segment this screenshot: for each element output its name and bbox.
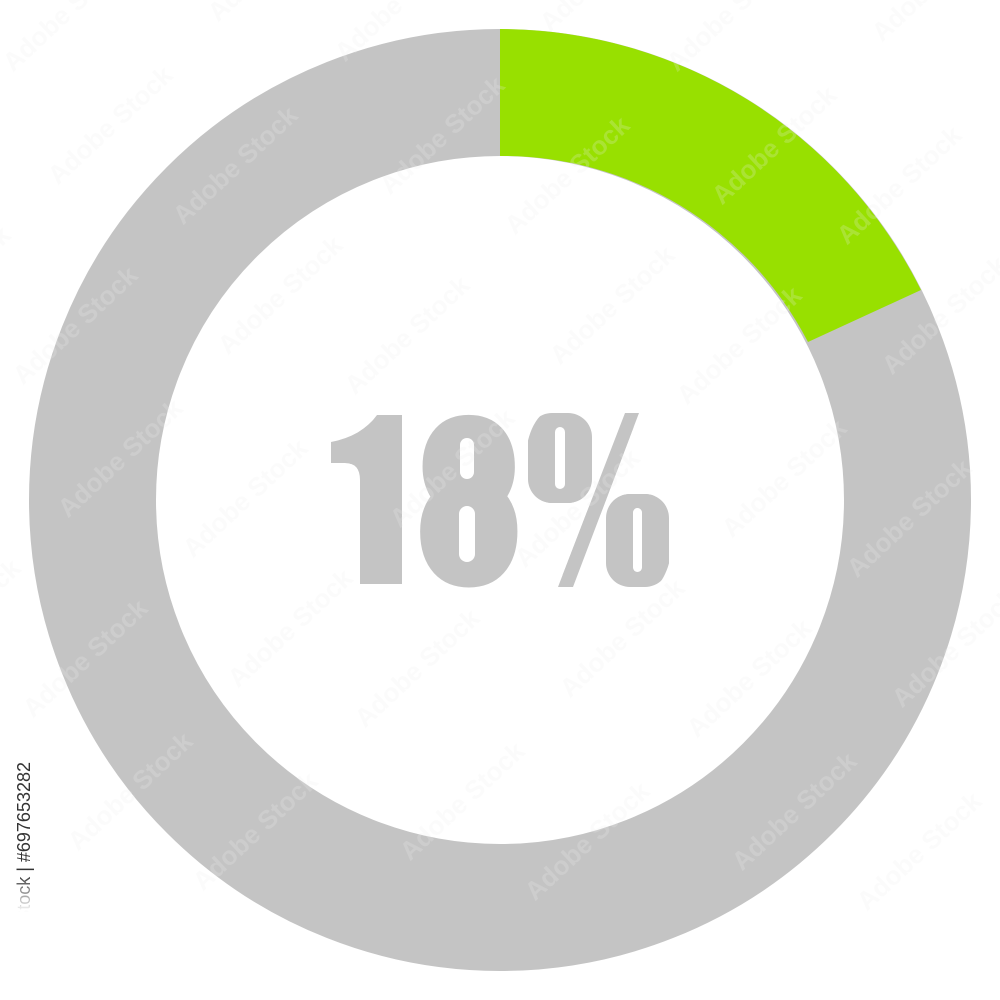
- watermark pattern: Adobe Stock: [62, 725, 199, 856]
- watermark pattern: Adobe Stock: [509, 442, 646, 573]
- percentage label: 8: [427, 390, 510, 613]
- percentage label: [331, 413, 669, 588]
- watermark pattern: Adobe Stock: [671, 279, 808, 410]
- watermark pattern: Adobe Stock: [706, 79, 843, 210]
- watermark pattern: Adobe Stock: [222, 562, 359, 693]
- watermark pattern: Adobe Stock: [851, 785, 988, 916]
- watermark pattern: Adobe Stock: [394, 735, 531, 866]
- donut chart: [92, 29, 921, 908]
- donut track: [92, 92, 908, 908]
- donut green segment: [500, 29, 921, 342]
- percentage label: 1: [325, 371, 431, 637]
- watermark pattern: Adobe Stock: [716, 412, 853, 543]
- watermark pattern: Adobe Stock: [187, 765, 324, 896]
- watermark pattern: Adobe Stock: [167, 99, 304, 230]
- watermark pattern: Adobe Stock: [554, 572, 691, 703]
- watermark pattern: Adobe Stock: [52, 392, 189, 523]
- watermark pattern: Adobe Stock: [831, 119, 968, 250]
- watermark pattern: Adobe Stock: [544, 239, 681, 370]
- watermark pattern: Adobe Stock: [349, 602, 486, 733]
- watermark pattern: Adobe Stock: [212, 229, 349, 360]
- watermark pattern: Adobe Stock: [841, 452, 978, 583]
- stock id caption: Adobe Stock | #697653282: [14, 762, 34, 979]
- watermark pattern: Adobe Stock: [339, 269, 476, 400]
- watermark pattern: Adobe Stock: [519, 775, 656, 906]
- percentage label: %: [534, 381, 664, 621]
- watermark pattern: Adobe Stock: [726, 745, 863, 876]
- watermark pattern: Adobe Stock: [681, 612, 818, 743]
- watermark pattern: Adobe Stock: [42, 59, 179, 190]
- watermark pattern: Adobe Stock: [17, 592, 154, 723]
- watermark pattern: Adobe Stock: [177, 432, 314, 563]
- watermark pattern: Adobe Stock: [374, 69, 511, 200]
- watermark pattern: Adobe Stock: [7, 259, 144, 390]
- watermark pattern: Adobe Stock: [384, 402, 521, 533]
- watermark pattern: Adobe Stock: [499, 109, 636, 240]
